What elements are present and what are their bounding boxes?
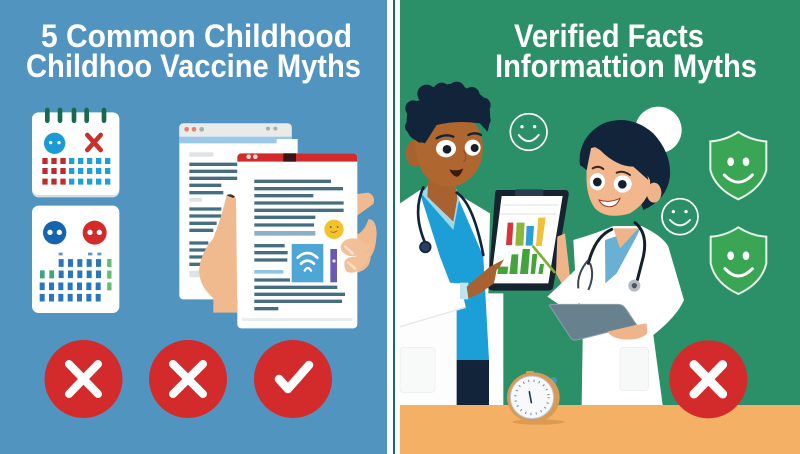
male doctor	[400, 82, 503, 405]
icon: shield lower	[711, 227, 766, 294]
clipboard with bar charts	[467, 189, 569, 298]
icon: bottom calendar	[32, 206, 119, 313]
icon: shield upper	[710, 132, 766, 199]
icon: smiley lower	[662, 199, 698, 235]
icon: stopwatch	[507, 371, 564, 425]
heading: facts title	[495, 18, 757, 84]
icon: red cross two	[149, 340, 227, 418]
panel: verified facts	[395, 0, 800, 454]
icon: smiley upper	[510, 114, 547, 150]
panel: myths	[0, 0, 387, 454]
icon: red check	[254, 340, 332, 418]
icons and documents artwork	[32, 110, 377, 328]
back document window	[179, 123, 298, 299]
icon: red cross one	[44, 340, 122, 418]
table	[400, 405, 800, 454]
scene artwork	[400, 82, 800, 454]
heading: myths title: Childhoo Vaccine Myths	[26, 48, 361, 84]
hand holding documents	[199, 193, 377, 313]
icon: red cross	[669, 340, 747, 418]
front document window	[237, 153, 371, 328]
icon: top calendar	[32, 110, 119, 197]
heading: facts title: Verified Facts	[514, 18, 704, 54]
female nurse	[547, 107, 684, 405]
heading: myths title: 5 Common Childhood	[41, 18, 352, 54]
heading: myths title	[26, 18, 361, 84]
heading: facts title: Informattion Myths	[495, 48, 757, 84]
